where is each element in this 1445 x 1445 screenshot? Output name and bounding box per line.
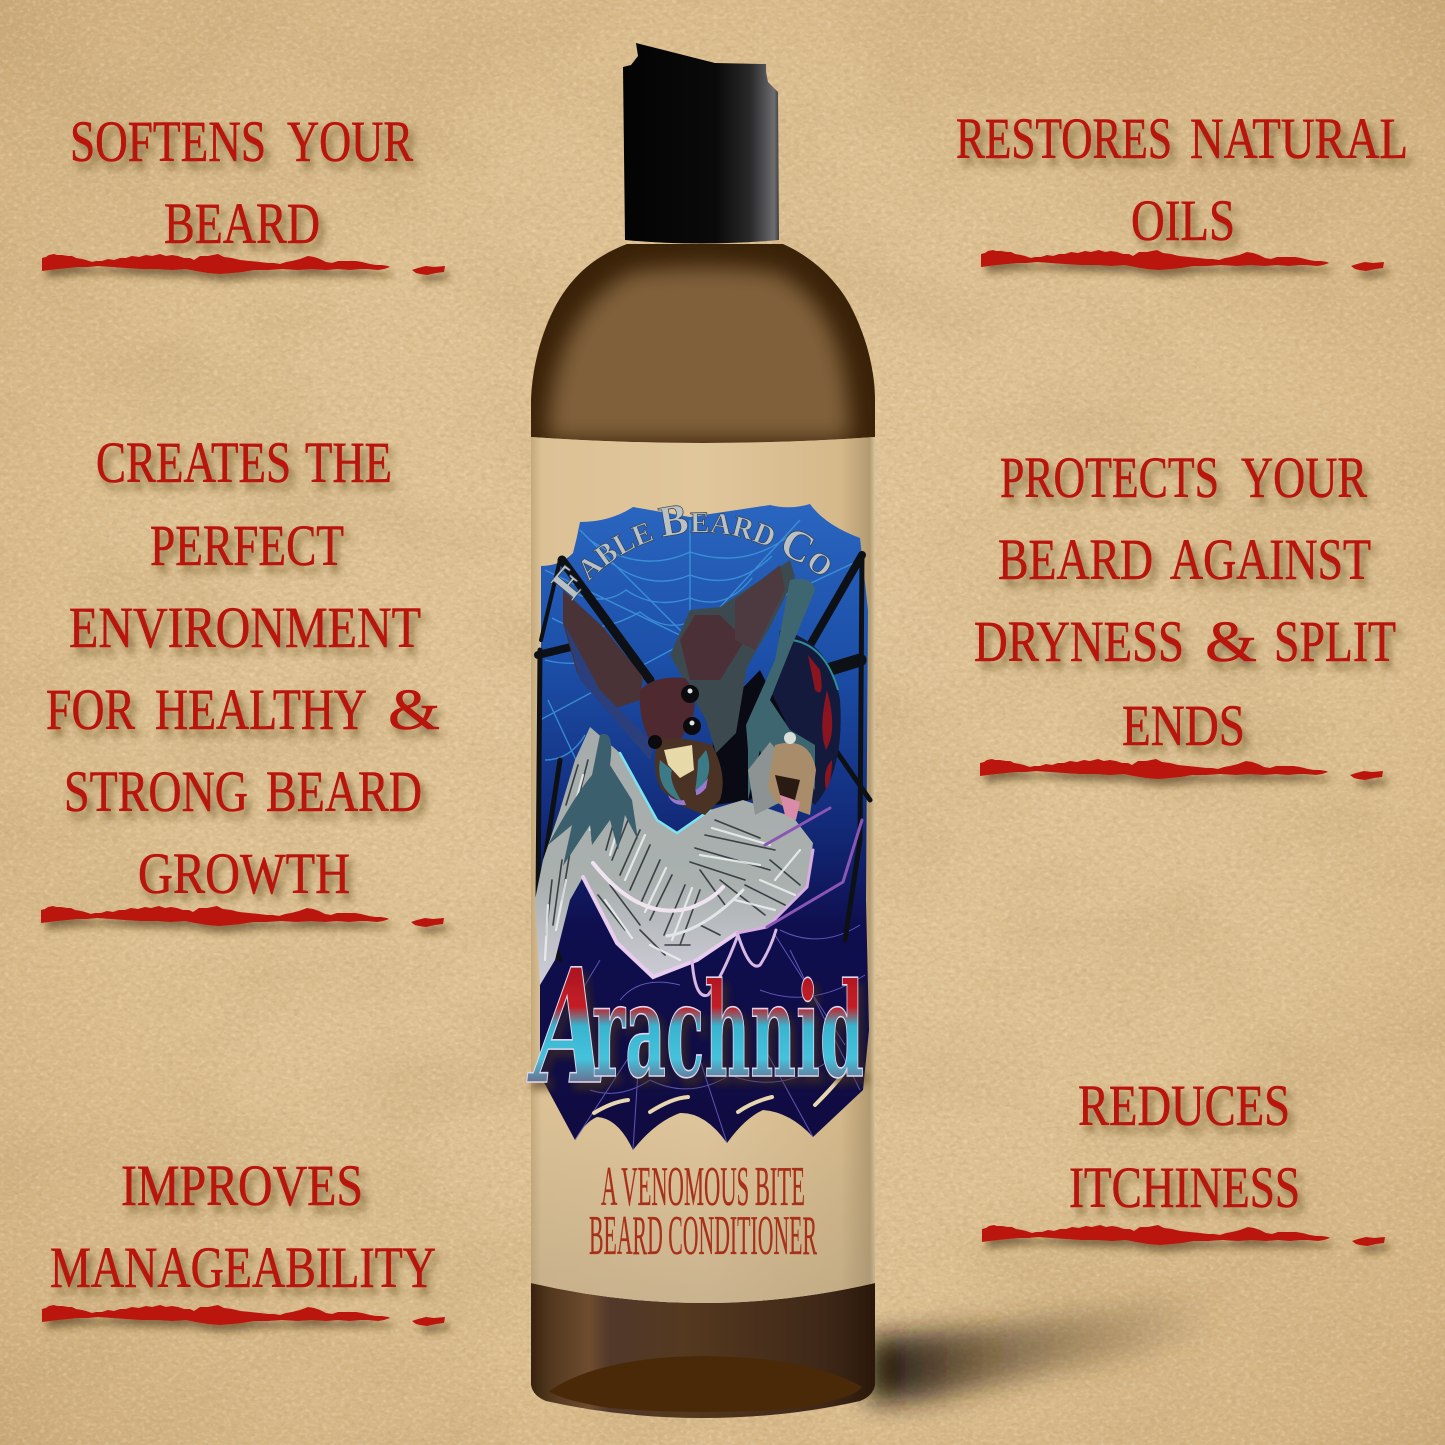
victim face and hair	[748, 732, 816, 820]
cocoon rim lights and ribbons	[583, 753, 862, 996]
right: protects your beard: &	[1205, 609, 1257, 674]
label artwork: A VENOMOUS BITE	[601, 1156, 805, 1218]
right: restores natural oils: OILS	[1131, 188, 1235, 253]
flip-top cap	[623, 43, 779, 244]
bottle base	[531, 1283, 875, 1418]
left: creates the perfect environment: GROWTH	[138, 841, 350, 906]
left: softens your beard	[42, 109, 445, 275]
left: creates the perfect environment: ENVIRONMENT	[69, 595, 421, 660]
left: creates the perfect environment: CREATES	[96, 430, 291, 495]
web threads	[540, 520, 860, 790]
brand name on web: FABLE BEARD CO	[550, 505, 830, 602]
left: softens your beard: YOUR	[287, 109, 413, 174]
left: softens your beard: SOFTENS	[70, 109, 266, 174]
right: reduces itchiness: REDUCES	[1078, 1073, 1290, 1138]
right: protects your beard: BEARD	[998, 527, 1153, 592]
right: restores natural oils	[956, 106, 1408, 271]
right: protects your beard	[974, 445, 1396, 780]
spider head	[640, 678, 723, 815]
bottle shoulder	[525, 240, 881, 445]
spider abdomen	[765, 630, 841, 805]
right: protects your beard: YOUR	[1241, 445, 1367, 510]
web highlights	[594, 1068, 848, 1113]
infographic canvas: BEARD CONDITIONER	[589, 1205, 817, 1267]
right: protects your beard: AGAINST	[1170, 527, 1371, 592]
product title	[526, 935, 864, 1120]
dark void under spider	[712, 670, 785, 805]
product title: A	[526, 935, 606, 1120]
right: reduces itchiness: ITCHINESS	[1069, 1155, 1300, 1220]
label lower shading	[531, 1100, 875, 1303]
spider front leg right	[746, 579, 815, 810]
right: protects your beard: PROTECTS	[1000, 445, 1219, 510]
spider back legs	[538, 555, 870, 960]
paper label	[531, 437, 875, 1303]
left: creates the perfect environment: BEARD	[266, 759, 422, 824]
right: protects your beard: ENDS	[1122, 693, 1245, 758]
spiderweb backdrop	[537, 504, 869, 1150]
right: protects your beard: DRYNESS	[974, 609, 1184, 674]
left: improves manageability: MANAGEABILITY	[50, 1235, 436, 1300]
amber liquid in base	[549, 1356, 862, 1412]
left: creates the perfect environment: PERFECT	[150, 513, 344, 578]
left: creates the perfect environment: HEALTHY	[155, 677, 367, 742]
spider left hand	[548, 734, 638, 866]
left: creates the perfect environment: THE	[305, 430, 392, 495]
cocoon silk strands	[545, 760, 800, 960]
right: protects your beard: SPLIT	[1274, 609, 1396, 674]
left: softens your beard: BEARD	[164, 191, 320, 256]
right: restores natural oils: RESTORES	[956, 106, 1172, 171]
product bottle	[526, 43, 875, 1418]
bottle ground shadow	[868, 1292, 1240, 1402]
product descriptor	[589, 1156, 817, 1267]
product bottle: rachnid	[592, 954, 864, 1107]
left: creates the perfect environment: &	[388, 677, 440, 742]
label artwork	[526, 504, 872, 1267]
left: improves manageability: IMPROVES	[121, 1153, 363, 1218]
lower web threads	[570, 925, 865, 1150]
cocoon wrapped body	[535, 727, 813, 985]
left: creates the perfect environment: FOR	[46, 677, 135, 742]
left: creates the perfect environment: STRONG	[64, 759, 248, 824]
left: creates the perfect environment	[41, 430, 444, 927]
right: reduces itchiness	[982, 1073, 1385, 1246]
left: improves manageability	[42, 1153, 445, 1326]
spider body and rear legs	[563, 560, 795, 760]
